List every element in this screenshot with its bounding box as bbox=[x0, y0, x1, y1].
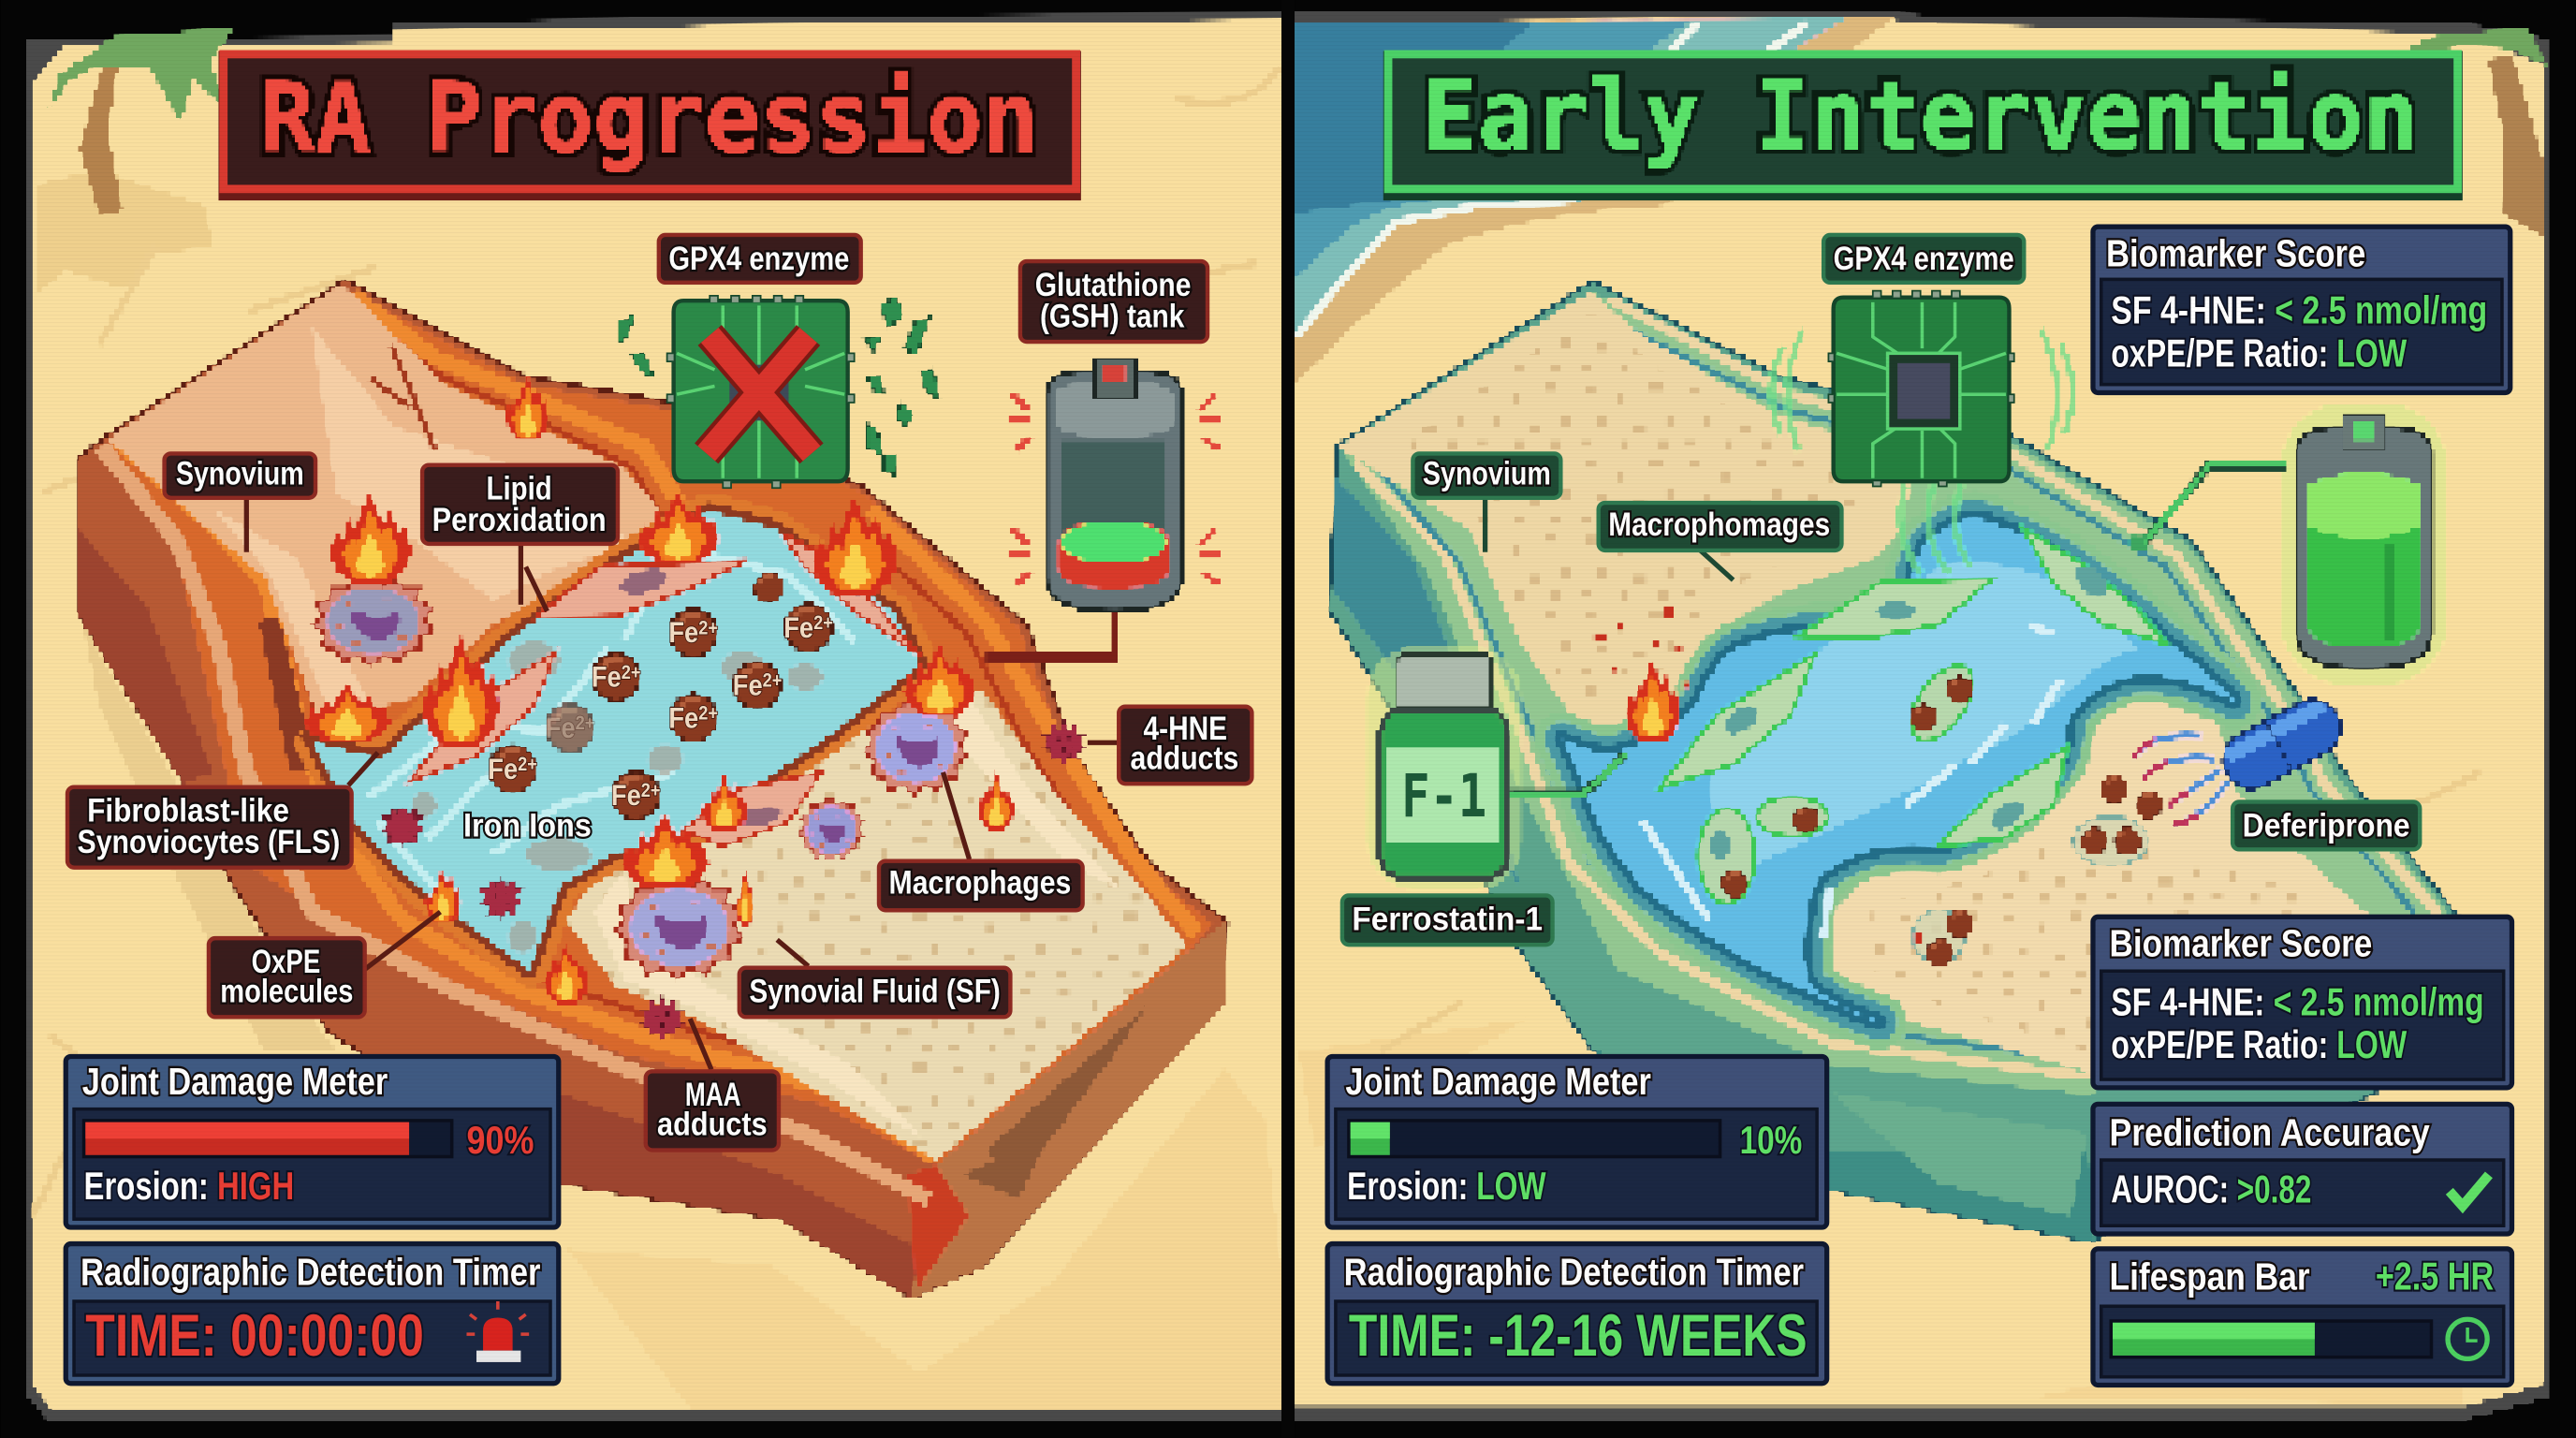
label: Macrophages (left) bbox=[879, 772, 1083, 910]
panel: prediction accuracy: AUROC: >0.82 bbox=[2111, 1167, 2311, 1211]
heading: RA Progression: RA Progression bbox=[259, 62, 1038, 174]
label: MAA adducts: MAA bbox=[685, 1077, 741, 1113]
upper sand bbox=[1339, 292, 1910, 740]
panel: lower biomarker score: oxPE/PE Ratio: LOW bbox=[2111, 1022, 2407, 1066]
panel: right detection timer: Radiographic Detection Timer bbox=[1344, 1250, 1804, 1293]
panel: left detection timer: Radiographic Detection Timer bbox=[80, 1250, 541, 1293]
panel: left background sand bbox=[33, 20, 1281, 1410]
right joint cross-section bbox=[1329, 281, 2513, 1242]
macrophage: lower bbox=[615, 878, 743, 978]
bands around fluid bbox=[314, 511, 920, 969]
darker side layers bbox=[78, 526, 920, 1298]
panel: right joint damage meter bbox=[1327, 1056, 1827, 1227]
iron ion labels: Fe bbox=[546, 711, 580, 744]
iron ions bbox=[489, 574, 832, 819]
panel: left detection timer: TIME: 00:00:00 bbox=[85, 1303, 424, 1369]
top surface bbox=[1344, 292, 2448, 1094]
right face bbox=[912, 922, 1227, 1298]
label: OxPE molecules bbox=[209, 912, 440, 1017]
engulfed iron cells in water bbox=[1699, 655, 1985, 903]
icon: full glutathione tank bbox=[2280, 403, 2448, 685]
label: Synovium (left): Synovium bbox=[176, 456, 304, 492]
tank connector right bbox=[2130, 465, 2287, 552]
panel: prediction accuracy bbox=[2093, 1104, 2511, 1234]
label: GPX4 enzyme (left) bbox=[659, 235, 861, 283]
label: GPX4 enzyme (right) bbox=[1823, 235, 2024, 283]
flames bbox=[304, 374, 1015, 1004]
label: Iron Ions: Iron Ions bbox=[463, 807, 592, 844]
iron ion labels: Fe bbox=[783, 610, 818, 644]
panel: left joint damage meter: 90% bbox=[466, 1118, 534, 1162]
ocean bbox=[1295, 17, 1895, 386]
label: Lipid Peroxidation bbox=[422, 465, 618, 611]
panel: lower biomarker score bbox=[2093, 917, 2511, 1088]
iron ion labels: 2+ bbox=[641, 780, 661, 801]
label: FLS: Synoviocytes (FLS) bbox=[78, 824, 340, 860]
panel: left joint damage meter: Joint Damage Meter bbox=[82, 1060, 388, 1103]
panel: prediction accuracy: Prediction Accuracy bbox=[2110, 1110, 2430, 1153]
sand cell halos bbox=[1912, 816, 2149, 962]
ripples around healthy chip bbox=[1772, 329, 2072, 575]
left joint cross-section bbox=[78, 279, 1227, 1298]
iron ion labels: 2+ bbox=[698, 703, 718, 725]
cream and teal wall stripes bbox=[1355, 299, 2438, 1077]
panel: upper biomarker score: SF 4-HNE: < 2.5 nmol/mg bbox=[2111, 288, 2487, 332]
label: Glutathione tank: (GSH) tank bbox=[1040, 298, 1185, 334]
panel: upper biomarker score: oxPE/PE Ratio: LOW bbox=[2111, 330, 2407, 374]
panel: left detection timer bbox=[66, 1244, 559, 1384]
panel: lower biomarker score: SF 4-HNE: < 2.5 nmol/mg bbox=[2111, 980, 2484, 1024]
panel: RA Progression title bbox=[218, 51, 1081, 200]
iron particles bbox=[1721, 677, 2162, 966]
icon: Ferrostatin-1 bottle bbox=[1367, 647, 1521, 890]
synovial fluid bbox=[314, 511, 920, 969]
iron ion labels: 2+ bbox=[698, 617, 718, 638]
iron ion labels: 2+ bbox=[518, 754, 537, 775]
bottle label text: F-1 bbox=[1401, 761, 1486, 830]
iron ion labels: Fe bbox=[668, 700, 703, 734]
label: OxPE molecules: molecules bbox=[220, 974, 353, 1010]
panel: Early Intervention title bbox=[1383, 51, 2463, 200]
label: Lipid Peroxidation: Lipid bbox=[487, 471, 552, 507]
label: Synovium (right) bbox=[1412, 453, 1560, 552]
center divider bbox=[1281, 0, 1295, 1438]
iron ion labels: Fe bbox=[668, 615, 703, 649]
heading: Early Intervention: Early Intervention bbox=[1423, 61, 2418, 173]
iron ion labels: 2+ bbox=[622, 662, 641, 683]
label: Lipid Peroxidation: Peroxidation bbox=[432, 502, 607, 538]
label: FLS bbox=[67, 753, 378, 868]
panel: right detection timer bbox=[1327, 1244, 1827, 1384]
top surface bbox=[107, 289, 1212, 1165]
panel: right joint damage meter: 10% bbox=[1740, 1118, 1802, 1162]
chip fragments bbox=[618, 298, 940, 477]
icon: healthy GPX4 chip bbox=[1828, 291, 2014, 486]
label: MAA adducts: adducts bbox=[657, 1107, 768, 1143]
panel: right joint damage meter: Erosion: LOW bbox=[1347, 1164, 1546, 1208]
tank connector bbox=[986, 611, 1114, 657]
panel: lower biomarker score: Biomarker Score bbox=[2110, 921, 2372, 964]
label: GPX4 enzyme (right): GPX4 enzyme bbox=[1834, 241, 2014, 277]
small flame and sparks bbox=[1593, 605, 1924, 943]
icon: palm tree left bbox=[48, 28, 233, 217]
label: MAA adducts bbox=[646, 1019, 779, 1151]
iron ion labels: 2+ bbox=[763, 670, 782, 692]
label: Synovial Fluid bbox=[739, 940, 1010, 1017]
lower sand bbox=[1825, 694, 2448, 1071]
iron ion labels: Fe bbox=[733, 668, 768, 701]
label: FLS: Fibroblast-like bbox=[87, 793, 289, 829]
red X bbox=[707, 335, 812, 453]
icon: clock bbox=[2448, 1319, 2487, 1358]
iron ion labels: 2+ bbox=[813, 612, 833, 634]
icon: palm tree right bbox=[2389, 28, 2546, 238]
bottle connector bbox=[1512, 755, 1627, 794]
beige joint space bbox=[567, 690, 1186, 1160]
icon: broken GPX4 chip bbox=[667, 296, 855, 488]
icon: siren bbox=[466, 1301, 529, 1362]
label: GPX4 enzyme (left): GPX4 enzyme bbox=[668, 241, 849, 277]
water bbox=[1562, 519, 2234, 1022]
iron ion labels: Fe bbox=[488, 752, 522, 785]
label: Synovium (left) bbox=[165, 453, 315, 552]
label: Macrophomages bbox=[1599, 503, 1841, 580]
label: Glutathione tank: Glutathione bbox=[1035, 267, 1191, 303]
macrophage: blue bbox=[864, 702, 968, 795]
label: Synovial Fluid: Synovial Fluid (SF) bbox=[749, 974, 1001, 1010]
label: 4-HNE adducts: adducts bbox=[1131, 740, 1238, 776]
icon: check mark bbox=[2450, 1175, 2489, 1206]
iron ion labels: Fe bbox=[592, 660, 626, 694]
panel: lifespan bar: +2.5 HR bbox=[2376, 1255, 2494, 1299]
panel: left joint damage meter bbox=[66, 1056, 559, 1227]
label: Ferrostatin-1: Ferrostatin-1 bbox=[1352, 901, 1543, 937]
label: OxPE molecules: OxPE bbox=[252, 944, 320, 980]
panel: upper biomarker score: Biomarker Score bbox=[2106, 231, 2365, 274]
fibroblast-like cells bbox=[409, 534, 920, 846]
icon: Deferiprone capsule bbox=[2214, 690, 2350, 799]
bar: lifespan bbox=[2111, 1321, 2431, 1357]
panel: left joint damage meter: Erosion: HIGH bbox=[84, 1164, 294, 1208]
tissue block base bbox=[78, 279, 1227, 1298]
label: Macrophages (left): Macrophages bbox=[889, 865, 1071, 902]
dark wedge bbox=[258, 616, 315, 772]
iron ion labels bbox=[488, 610, 833, 812]
panel: upper biomarker score bbox=[2093, 227, 2510, 392]
adduct molecules bbox=[381, 721, 1087, 1040]
water walls bbox=[1562, 519, 2234, 1022]
panel: right joint damage meter: Joint Damage Meter bbox=[1345, 1060, 1651, 1103]
bar: 10% bbox=[1349, 1121, 1720, 1157]
label: Glutathione tank bbox=[1020, 261, 1208, 342]
icon: depleted glutathione tank bbox=[1007, 359, 1221, 611]
bar: 90% bbox=[84, 1121, 452, 1157]
peach synovium bbox=[109, 285, 657, 723]
label: 4-HNE adducts bbox=[1088, 707, 1251, 784]
macrophage: small bbox=[798, 800, 864, 861]
outer wall bands bbox=[118, 296, 1196, 1157]
block base bbox=[1329, 281, 2513, 1242]
panel: lifespan bar: Lifespan Bar bbox=[2110, 1255, 2310, 1299]
label: 4-HNE adducts: 4-HNE bbox=[1144, 711, 1227, 747]
label: Macrophomages: Macrophomages bbox=[1608, 506, 1830, 543]
panel: right background sand bbox=[1295, 17, 2543, 1406]
iron ion labels: Fe bbox=[611, 778, 646, 812]
macrophage: burning upper bbox=[313, 579, 433, 666]
iron ion labels: 2+ bbox=[576, 712, 594, 734]
panel: lifespan bar bbox=[2093, 1249, 2511, 1385]
chelation arcs bbox=[2132, 735, 2228, 827]
label: Synovium (right): Synovium bbox=[1423, 456, 1551, 492]
healthy fibroblast cells bbox=[1660, 529, 2167, 846]
cream edge strip bbox=[102, 447, 929, 1199]
label: Deferiprone: Deferiprone bbox=[2243, 807, 2410, 844]
panel: right detection timer: TIME: -12-16 WEEKS bbox=[1349, 1303, 1808, 1369]
